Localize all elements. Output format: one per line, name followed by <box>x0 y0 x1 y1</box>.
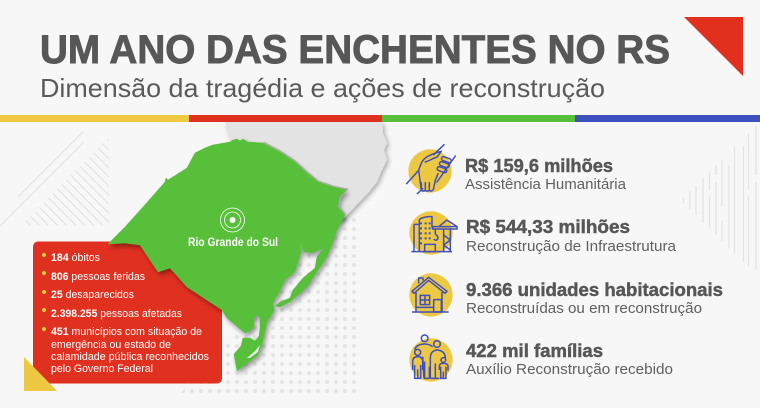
map label: Rio Grande do Sul <box>188 237 278 249</box>
stat: housing units <box>409 273 723 317</box>
stat: humanitarian assistance <box>407 145 627 194</box>
decorative hatching, left <box>0 132 109 226</box>
icon: building and crane <box>409 211 457 255</box>
red corner triangle <box>684 17 743 76</box>
bullet: municipalities: emergência ou estado de <box>51 339 171 351</box>
yellow corner triangle <box>24 357 57 391</box>
neighbouring territory map, grey <box>225 122 387 222</box>
decorative vertical stripes, right <box>684 126 756 270</box>
icon: house <box>409 273 453 317</box>
stat caption: Reconstrução de Infraestrutura <box>466 239 677 255</box>
stat value: 422 mil famílias <box>466 341 603 361</box>
stat value: 9.366 unidades habitacionais <box>466 280 723 300</box>
bullet: municipalities: calamidade pública reconhecidos <box>51 351 210 363</box>
map marker <box>220 208 244 232</box>
title: UM ANO DAS ENCHENTES NO RS <box>40 28 670 72</box>
icon: family <box>409 335 453 382</box>
subtitle: Dimensão da tragédia e ações de reconstrução <box>40 73 605 103</box>
icon: handshake <box>407 145 455 194</box>
panel: impact figures <box>33 242 222 384</box>
stat value: R$ 159,6 milhões <box>465 156 613 176</box>
stat caption: Assistência Humanitária <box>465 177 627 193</box>
stat caption: Auxílio Reconstrução recebido <box>466 362 673 378</box>
bullet: affected: 2.398.255 pessoas afetadas <box>51 308 183 320</box>
bullet: deaths: 184 óbitos <box>51 252 101 264</box>
stat value: R$ 544,33 milhões <box>466 217 630 237</box>
decorative dot grid <box>179 215 358 395</box>
colour divider bar <box>0 115 760 122</box>
bullet: municipalities: pelo Governo Federal <box>51 363 153 375</box>
map: Rio Grande do Sul <box>108 139 348 371</box>
stat: families <box>409 335 673 382</box>
bullet: municipalities: 451 municípios com situação de <box>51 326 202 338</box>
stat: infrastructure <box>409 211 677 255</box>
bullet: municipalities <box>42 326 210 375</box>
bullet: missing: 25 desaparecidos <box>51 289 135 301</box>
stat caption: Reconstruídas ou em reconstrução <box>466 301 702 317</box>
bullet: injured: 806 pessoas feridas <box>51 271 146 283</box>
